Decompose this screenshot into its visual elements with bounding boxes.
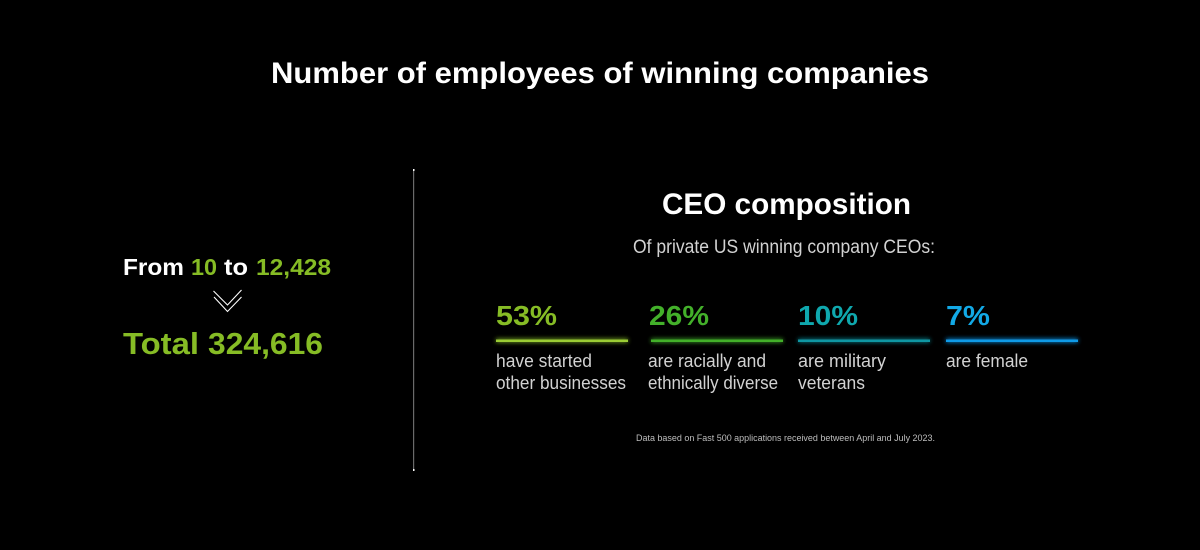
panel: CEO composition [496, 188, 1078, 443]
range text: to [224, 254, 248, 280]
footnote: Data based on Fast 500 applications received between April and July 2023. [636, 433, 935, 443]
stat: 26%: ethnically diverse [648, 372, 778, 393]
range text: 12,428 [256, 254, 331, 280]
stat: 7% [946, 300, 1078, 371]
stat: 10%: veterans [798, 372, 865, 393]
stat: 7%: are female [946, 350, 1028, 371]
stat: 10% [798, 300, 930, 393]
stat: 26%: are racially and [648, 350, 766, 371]
stat: 26%: 26% [649, 300, 709, 331]
total employees [123, 326, 323, 361]
total employees: 324,616 [208, 326, 323, 361]
CEO subheading: Of private US winning company CEOs: [633, 237, 935, 258]
stat: 10%: are military [798, 350, 887, 371]
vertical divider [413, 169, 414, 471]
stat: 53%: other businesses [496, 372, 626, 393]
range text: 10 [191, 254, 217, 280]
stat: 53%: have started [496, 350, 592, 371]
range text [123, 254, 331, 280]
CEO heading: CEO composition [662, 188, 911, 221]
stat: 10%: 10% [798, 300, 858, 331]
stat: 7%: 7% [946, 300, 990, 331]
range text: From [123, 254, 184, 280]
panel: employee range [123, 254, 331, 361]
total employees: Total [123, 326, 199, 361]
stat: 53%: 53% [496, 300, 557, 331]
icon: double chevron down [214, 290, 242, 312]
stat: 26% [648, 300, 783, 393]
stat: 53% [496, 300, 628, 393]
title: Number of employees of winning companies [271, 57, 929, 90]
